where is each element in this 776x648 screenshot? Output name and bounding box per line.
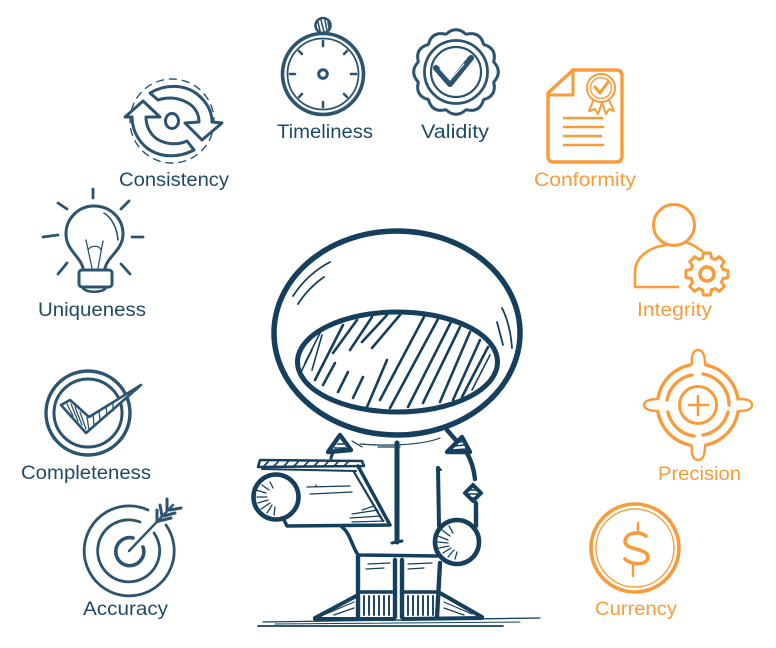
icon: person with gear [635,204,728,295]
icon: target with arrow [84,499,181,596]
label: Conformity: Conformity [534,170,637,191]
metric: Conformity [534,70,637,191]
icon: check in circle [46,371,141,455]
helmet highlights [281,262,512,348]
label: Validity: Validity [421,122,490,143]
icon: stopwatch [282,18,364,114]
robot legs and boots [315,556,482,619]
label: Accuracy: Accuracy [83,599,169,620]
metric: Validity [414,30,498,143]
robot shoulder pads [328,435,481,501]
label: Integrity: Integrity [637,300,713,321]
icon: dollar coin [591,504,679,592]
label: Currency: Currency [595,599,678,620]
robot helmet [274,231,520,435]
metric: Timeliness [277,18,373,143]
metric: Integrity [635,204,728,321]
robot torso and arm [331,430,476,556]
icon: crosshair [644,350,752,460]
robot tablet [258,460,390,526]
label: Consistency: Consistency [119,170,230,191]
label: Uniqueness: Uniqueness [38,300,146,321]
icon: scalloped check badge [414,30,498,114]
ground lines [258,618,540,626]
robot left hand [254,474,298,520]
icon: circular arrows [125,79,222,163]
icon: light bulb with rays [43,189,143,292]
label: Precision: Precision [658,464,741,485]
metric: Consistency [119,79,230,191]
robot visor with hatching [298,312,498,412]
metric: Completeness [21,371,151,484]
robot character [254,231,540,626]
icon: certificate document [548,70,622,162]
label: Completeness: Completeness [21,463,151,484]
metric: Currency [591,504,679,620]
metric: Precision [644,350,752,485]
robot right hand [435,520,479,564]
metric: Uniqueness [38,189,146,321]
metric: Accuracy [83,499,181,620]
label: Timeliness: Timeliness [277,122,373,143]
